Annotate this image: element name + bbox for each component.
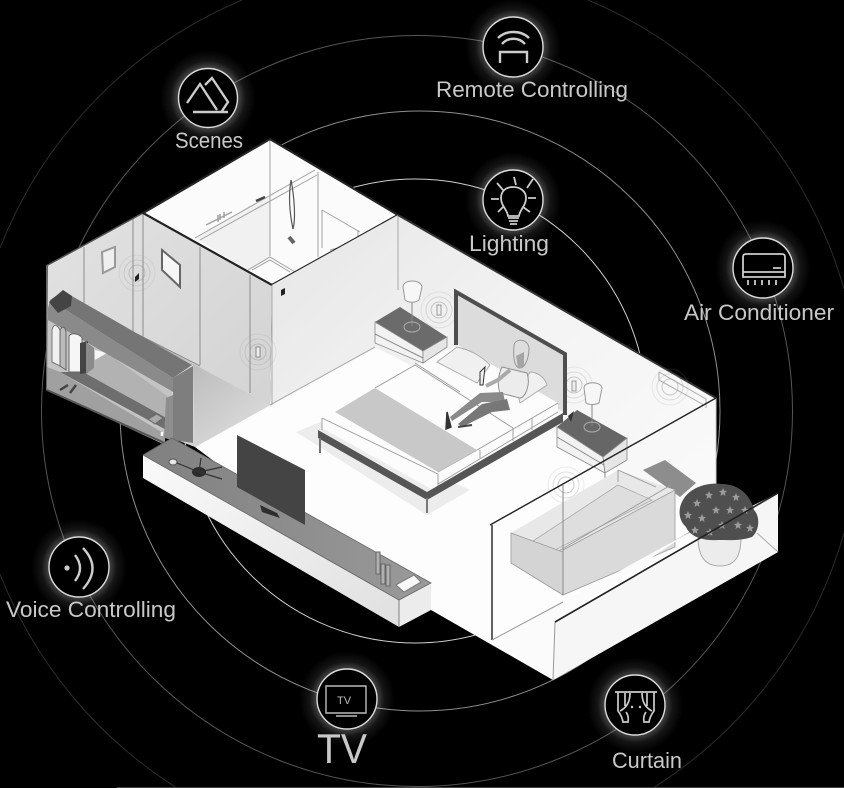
device: lighting: Lighting [469,231,549,256]
sofa [511,470,690,605]
pillows [437,347,490,383]
wall switches with signal waves [119,255,688,530]
bedroom wall [270,215,716,622]
device: tv [299,651,395,772]
left room walls [46,213,272,447]
bed [296,292,565,515]
device: scenes [160,50,256,153]
device: tv: TV [317,725,367,772]
bed frame [318,413,563,500]
plant [680,484,758,566]
device: curtain: Curtain [612,748,682,773]
device: curtain [587,657,683,773]
device: air conditioner: Air Conditioner [684,300,834,325]
device: air conditioner [684,220,834,325]
left room floor [137,334,270,447]
device: scenes: Scenes [175,128,243,153]
wall pictures [102,247,180,287]
device: remote controlling: Remote Controlling [436,77,628,102]
seated person with tablet [446,340,529,429]
device: remote controlling [436,0,628,102]
headboard [455,292,565,413]
isometric room illustration [46,139,778,680]
bathroom interior [143,139,398,285]
bedroom floor [195,347,778,680]
tv console [143,438,431,627]
device: voice controlling: Voice Controlling [6,597,176,622]
left nightstand with lamp [375,281,447,363]
front wall top edge [555,493,778,622]
device: voice controlling [6,519,176,622]
air conditioner unit [659,372,706,408]
bookshelf [46,266,193,445]
rug [643,460,696,497]
glass front walls [490,398,778,680]
television [237,435,305,525]
device: lighting [465,152,561,256]
device: tv: TV [337,695,352,707]
right nightstand with lamp [557,383,627,480]
